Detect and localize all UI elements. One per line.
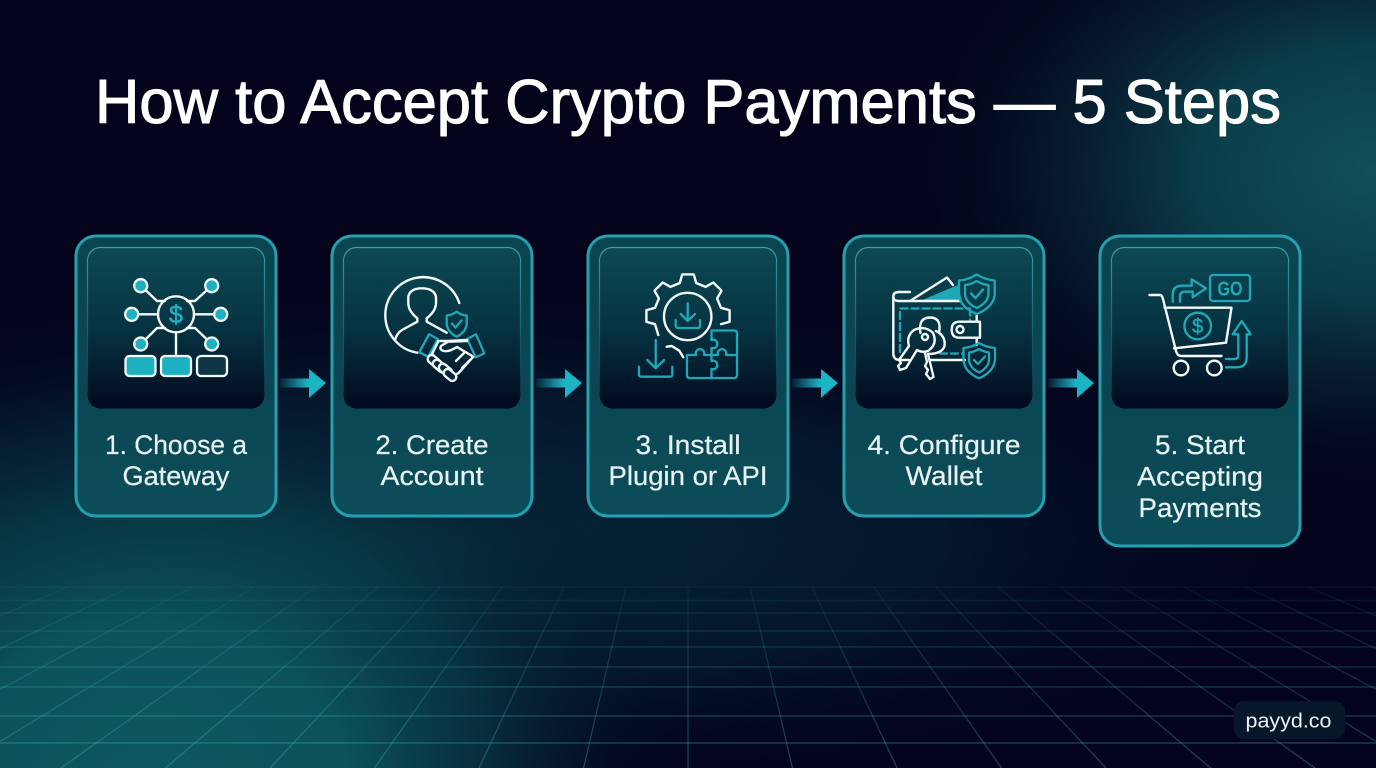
step 2 card bbox=[332, 236, 532, 516]
step 3 label bbox=[608, 430, 768, 491]
icon: shopping cart and go: $ bbox=[1192, 316, 1203, 338]
step 5 label: 5. Start bbox=[1155, 430, 1246, 460]
arrow 1 bbox=[280, 369, 326, 398]
step 2 label bbox=[376, 430, 488, 491]
icon: gateway network bbox=[125, 279, 227, 376]
arrow 3 bbox=[792, 369, 838, 398]
step 4 label: 4. Configure bbox=[868, 430, 1020, 460]
step 1 label: Gateway bbox=[122, 461, 230, 491]
step 4 card bbox=[844, 236, 1044, 516]
brand badge bbox=[1234, 701, 1345, 739]
arrow 4 bbox=[1048, 369, 1094, 398]
icon: wallet, keys and shields bbox=[893, 274, 995, 379]
icon: shopping cart and go bbox=[1150, 275, 1251, 375]
brand badge: payyd.co bbox=[1246, 710, 1332, 732]
icon: gear, download and puzzle bbox=[639, 274, 737, 378]
step 1 label: 1. Choose a bbox=[105, 430, 248, 460]
step 2 label: 2. Create bbox=[376, 430, 488, 460]
step 4 label: Wallet bbox=[906, 461, 983, 491]
step 3 label: 3. Install bbox=[636, 430, 740, 460]
step 5 label bbox=[1137, 430, 1263, 523]
step 3 card bbox=[588, 236, 788, 516]
arrow 2 bbox=[536, 369, 582, 398]
step 4 label bbox=[868, 430, 1020, 491]
title: How to Accept Crypto Payments — 5 Steps bbox=[95, 68, 1281, 137]
step 2 label: Account bbox=[380, 461, 484, 491]
step 5 label: Payments bbox=[1138, 493, 1262, 523]
step 5 card bbox=[1100, 236, 1300, 546]
step 1 card bbox=[76, 236, 276, 516]
icon: gateway network: $ bbox=[169, 301, 183, 329]
step 1 label bbox=[105, 430, 248, 491]
perspective grid floor bbox=[0, 587, 1376, 768]
step 3 label: Plugin or API bbox=[608, 461, 768, 491]
icon: shopping cart and go: GO bbox=[1218, 278, 1242, 300]
step 5 label: Accepting bbox=[1137, 462, 1263, 492]
icon: account and handshake bbox=[385, 277, 484, 383]
